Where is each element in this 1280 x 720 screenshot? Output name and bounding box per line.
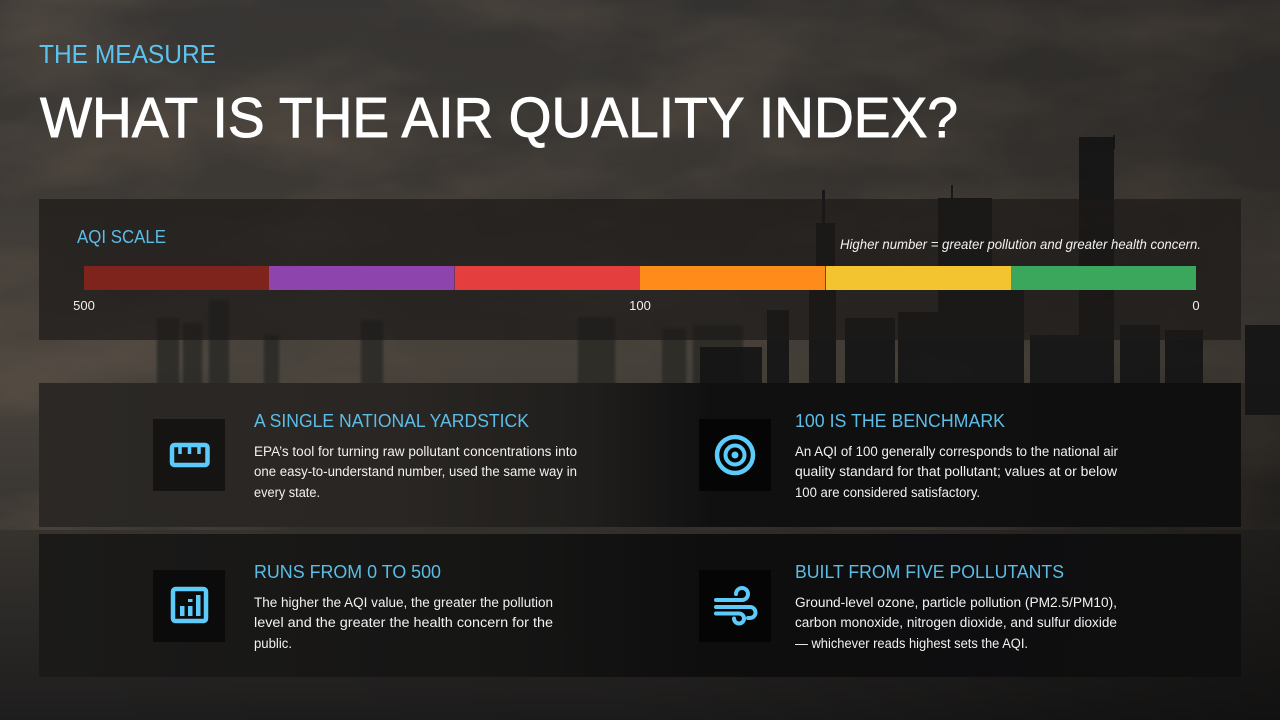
text block: built from five pollutants: BUILT FROM FIVE POLLUTANTS [795,561,1064,582]
text block: built from five pollutants: Ground-level ozone, particle pollution (PM2.5/PM10), [795,595,1117,610]
icon: target [699,419,771,491]
heading: AQI scale: AQI SCALE [77,226,166,247]
text block: a single national yardstick: A SINGLE NATIONAL YARDSTICK [254,410,530,431]
text block: a single national yardstick: one easy-to-understand number, used the same way in [254,464,577,479]
text block: runs from 0 to 500: public. [254,636,292,651]
text block: 100 is the benchmark: quality standard for that pollutant; values at or below [795,464,1117,479]
panel: AQI scale [39,199,1241,340]
eyebrow: the measure: THE MEASURE [39,39,216,69]
chart: AQI colour bar [84,266,1196,290]
label: 0: 0 [1192,298,1200,313]
title: WHAT IS THE AIR QUALITY INDEX? [40,86,958,150]
text block: built from five pollutants: carbon monoxide, nitrogen dioxide, and sulfur dioxide [795,615,1117,630]
text block: runs from 0 to 500: level and the greater the health concern for the [254,615,553,630]
text block: 100 is the benchmark [795,410,1118,500]
icon: ruler [153,419,225,491]
icon: bar chart [153,570,225,642]
label: 500: 500 [73,298,95,313]
text block: built from five pollutants [795,561,1117,651]
text block: 100 is the benchmark: An AQI of 100 generally corresponds to the national air [795,444,1118,459]
text block: a single national yardstick: EPA’s tool for turning raw pollutant concentrations into [254,444,577,459]
note: higher number meaning: Higher number = greater pollution and greater health concern. [840,236,1201,252]
label: 100: 100 [629,298,651,313]
text block: 100 is the benchmark: 100 IS THE BENCHMARK [795,410,1006,431]
text block: a single national yardstick [254,410,577,500]
icon: wind [699,570,771,642]
panel: bottom row [39,534,1241,677]
text block: a single national yardstick: every state. [254,485,320,500]
text block: 100 is the benchmark: 100 are considered satisfactory. [795,485,980,500]
text block: runs from 0 to 500 [254,561,553,651]
text block: built from five pollutants: — whichever reads highest sets the AQI. [795,636,1028,651]
text block: runs from 0 to 500: The higher the AQI value, the greater the pollution [254,595,553,610]
text block: runs from 0 to 500: RUNS FROM 0 TO 500 [254,561,441,582]
panel: top row [39,383,1241,527]
